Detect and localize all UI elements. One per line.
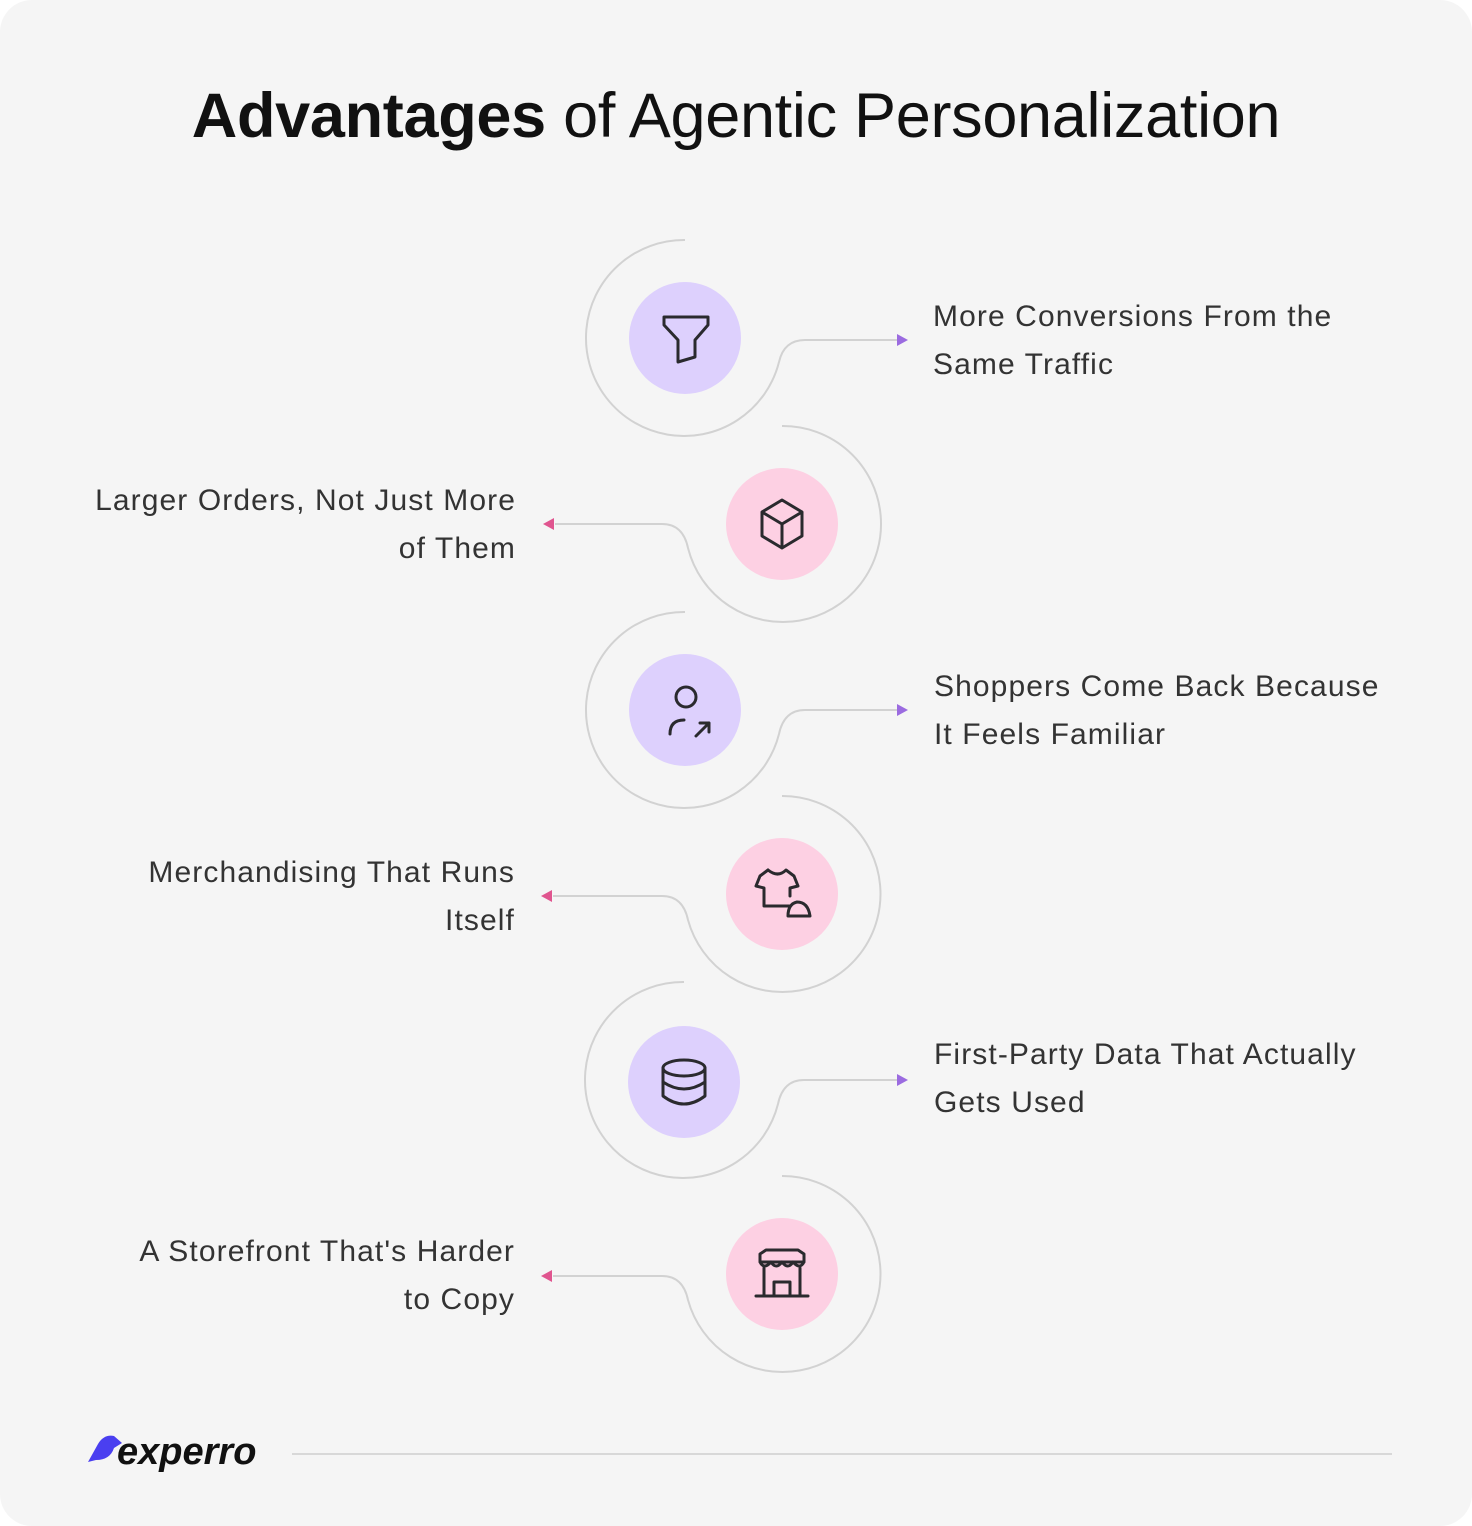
text 6: to Copy [404, 1283, 515, 1316]
text 5: Gets Used [934, 1086, 1086, 1119]
text 2: Larger Orders, Not Just More [95, 484, 516, 517]
text 4 [148, 856, 515, 937]
text 1 [933, 300, 1332, 381]
text 6 [139, 1235, 515, 1316]
text 4: Merchandising That Runs [148, 856, 515, 889]
title: Advantages of Agentic Personalization [192, 81, 1280, 151]
arrows [541, 334, 908, 1282]
text 1: More Conversions From the [933, 300, 1332, 333]
logo bird [88, 1436, 122, 1462]
text 3 [934, 670, 1380, 751]
text 3: Shoppers Come Back Because [934, 670, 1380, 703]
logo: experro [117, 1431, 256, 1473]
text 3: It Feels Familiar [934, 718, 1166, 751]
connector rings [553, 240, 898, 1372]
text 2 [95, 484, 516, 565]
text 1: Same Traffic [933, 348, 1114, 381]
icon circles [628, 282, 838, 1330]
text 5: First-Party Data That Actually [934, 1038, 1357, 1071]
text 4: Itself [445, 904, 515, 937]
text 5 [934, 1038, 1357, 1119]
text 6: A Storefront That's Harder [139, 1235, 515, 1268]
text 2: of Them [399, 532, 516, 565]
icons [663, 317, 810, 1296]
